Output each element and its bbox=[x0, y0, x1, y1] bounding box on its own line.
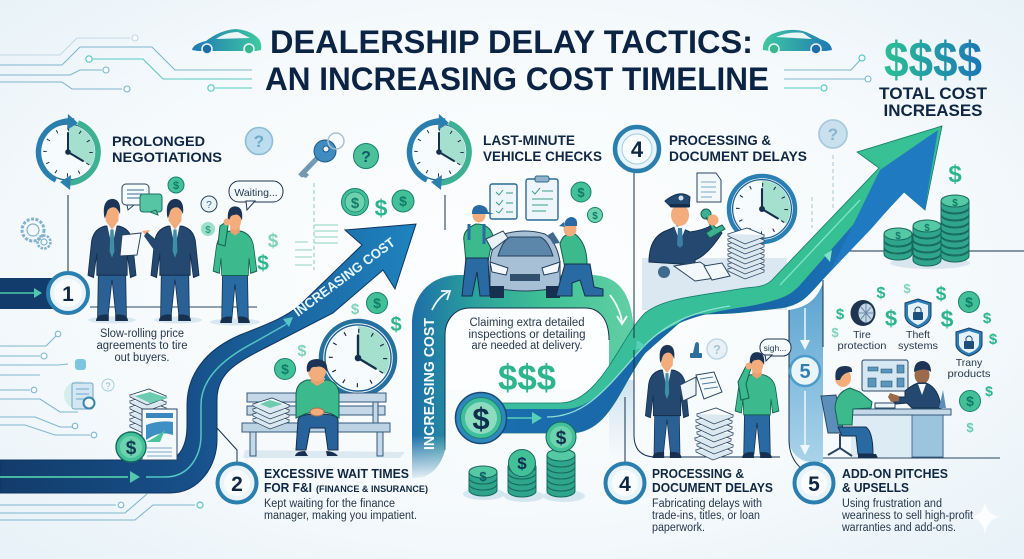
lower scene: paper stack bbox=[695, 408, 733, 460]
coin stacks right: $ bbox=[952, 198, 958, 209]
coins around large clock bbox=[274, 292, 402, 380]
total cost block: TOTAL COST bbox=[879, 85, 987, 103]
heading: last-minute vehicle checks: LAST-MINUTE bbox=[483, 132, 575, 148]
coins around large clock: $ bbox=[351, 301, 360, 318]
title bbox=[265, 24, 769, 97]
clock with arrows: prolonged negotiations bbox=[38, 114, 98, 190]
step badge 4 bottom bbox=[606, 464, 644, 502]
text block: add-on pitches: warranties and add-ons. bbox=[841, 522, 956, 534]
coins around large clock: $ bbox=[298, 343, 307, 360]
total cost block: INCREASES bbox=[884, 102, 982, 120]
step badge 5 bottom bbox=[794, 464, 834, 502]
step badge 4 bottom: 4 bbox=[619, 473, 631, 496]
coins and dollars: negotiations scene bbox=[168, 177, 414, 275]
step badge 5 bottom: 5 bbox=[808, 473, 820, 496]
clock: document delays bbox=[729, 176, 795, 242]
text block: add-on pitches: Using frustration and bbox=[842, 498, 942, 510]
text block: processing bottom: DOCUMENT DELAYS bbox=[652, 480, 773, 495]
dollar signs: mid: $$$ bbox=[498, 357, 556, 398]
product labels: Trany bbox=[956, 357, 983, 369]
people: two salesmen negotiating bbox=[88, 184, 202, 324]
dollars scatter: add-ons: $ bbox=[966, 393, 974, 409]
icon: shield trany products bbox=[956, 328, 982, 356]
text block: excessive wait times: FOR F&I bbox=[264, 480, 312, 495]
coin stacks right bbox=[884, 161, 970, 269]
heading: last-minute vehicle checks bbox=[483, 132, 602, 164]
circuit lines: top right bbox=[784, 55, 871, 91]
title: DEALERSHIP DELAY TACTICS: bbox=[270, 24, 753, 60]
text block: processing bottom: paperwork. bbox=[652, 522, 705, 534]
coin stacks right: $ bbox=[895, 231, 901, 242]
clipboards: $ bbox=[577, 185, 585, 200]
top left ribbon stub bbox=[0, 278, 55, 309]
clock with arrows: last-minute checks bbox=[409, 114, 469, 190]
text block: claiming bbox=[468, 317, 586, 352]
coin stacks right: $ bbox=[924, 223, 930, 234]
main total cost arrow ribbon bbox=[480, 126, 942, 433]
pale panels behind lower scenes bbox=[609, 251, 1024, 460]
text block: add-on pitches: ADD-ON PITCHES bbox=[842, 466, 948, 481]
text block: excessive wait times: EXCESSIVE WAIT TIMES bbox=[264, 466, 409, 481]
coins and dollars: negotiations scene: $ bbox=[173, 180, 179, 192]
dollars scatter: add-ons: $ bbox=[989, 331, 998, 348]
coins around large clock: $ bbox=[373, 295, 381, 311]
coin stacks below ribbon bbox=[463, 422, 585, 502]
coin stacks below ribbon: $ bbox=[556, 428, 567, 449]
product labels: products bbox=[948, 368, 990, 380]
text block: claiming: Claiming extra detailed bbox=[470, 317, 584, 329]
car with mechanics bbox=[462, 205, 603, 298]
coin stacks right: $ bbox=[948, 161, 962, 188]
heading: prolonged negotiations: PROLONGED bbox=[112, 133, 205, 149]
coin stacks below ribbon: $ bbox=[479, 469, 487, 484]
product labels: Theft bbox=[906, 329, 930, 341]
coins and dollars: negotiations scene: $ bbox=[375, 195, 388, 221]
dollars scatter: add-ons bbox=[831, 281, 998, 435]
heading: prolonged negotiations bbox=[112, 133, 222, 165]
person waiting with speech bubble: Waiting... bbox=[234, 187, 278, 199]
dollars scatter: add-ons: $ bbox=[983, 310, 992, 327]
question badge right bbox=[819, 120, 847, 148]
text block: processing bottom: trade-ins, titles, or loan bbox=[652, 510, 760, 522]
heading: processing top: DOCUMENT DELAYS bbox=[669, 148, 807, 164]
paper stack with coin: $ bbox=[126, 438, 137, 459]
text block: add-on pitches bbox=[841, 466, 974, 534]
heading: processing top: PROCESSING & bbox=[669, 132, 771, 148]
paper stack with coin bbox=[116, 389, 177, 462]
product labels: Tire bbox=[853, 329, 871, 341]
lower scene: frustrated customer: ? bbox=[713, 342, 721, 357]
body: slow-rolling: Slow-rolling price bbox=[100, 328, 184, 340]
dollars scatter: add-ons: $ bbox=[877, 285, 886, 302]
clipboards bbox=[490, 176, 602, 222]
coins and dollars: negotiations scene: $ bbox=[257, 252, 269, 275]
main dollar coin bbox=[456, 392, 506, 444]
step badge 5 mid bbox=[790, 356, 820, 386]
text block: claiming: are needed at delivery. bbox=[472, 340, 582, 352]
body: slow-rolling bbox=[96, 328, 188, 364]
icon: gears bbox=[22, 219, 50, 248]
text block: excessive wait times: manager, making you impatient. bbox=[264, 510, 417, 522]
question and coin decorations: negotiations scene: ? bbox=[254, 132, 264, 151]
icon: key bbox=[300, 133, 344, 178]
coin stacks below ribbon: $ bbox=[517, 454, 527, 473]
step badge 5 mid: 5 bbox=[799, 361, 811, 383]
circuit lines and document icon: lower left: ? bbox=[105, 381, 111, 391]
circuit lines: top left bbox=[0, 35, 252, 92]
product labels: systems bbox=[898, 340, 938, 352]
step badge 4 top bbox=[615, 127, 659, 171]
text block: add-on pitches: & UPSELLS bbox=[842, 480, 909, 495]
arch ribbon: increasing cost vertical: INCREASING COST bbox=[422, 318, 438, 450]
coins and dollars: negotiations scene: $ bbox=[205, 225, 211, 236]
dollars scatter: add-ons: $ bbox=[936, 284, 947, 305]
text block: processing bottom bbox=[652, 466, 773, 534]
dollars scatter: add-ons: $ bbox=[941, 306, 954, 332]
body: slow-rolling: agreements to tire bbox=[96, 340, 188, 352]
text block: excessive wait times: (FINANCE & INSURANCE) bbox=[316, 484, 428, 494]
arch ribbon: increasing cost vertical bbox=[395, 275, 634, 482]
bench with waiting person bbox=[242, 359, 405, 458]
icon: shield theft systems bbox=[905, 299, 931, 328]
clipboards: $ bbox=[592, 211, 598, 222]
product labels bbox=[838, 329, 990, 380]
text block: excessive wait times: Kept waiting for the finance bbox=[264, 498, 395, 510]
step badge 2 bbox=[218, 464, 256, 502]
paper stack and documents on desk bbox=[658, 228, 764, 281]
product labels: protection bbox=[838, 340, 887, 352]
heading: prolonged negotiations: NEGOTIATIONS bbox=[112, 149, 222, 165]
text block: processing bottom: PROCESSING & bbox=[652, 466, 744, 481]
vertical timeline lines bbox=[68, 155, 1000, 465]
total cost block bbox=[879, 32, 987, 120]
dollars scatter: add-ons: $ bbox=[836, 306, 845, 323]
icon: car left bbox=[192, 29, 261, 54]
body: slow-rolling: out buyers. bbox=[114, 352, 170, 364]
dollars scatter: add-ons: $ bbox=[965, 294, 973, 310]
step badge 1: 1 bbox=[62, 283, 74, 306]
text block: processing bottom: Fabricating delays with bbox=[652, 498, 762, 510]
text block: excessive wait times bbox=[264, 466, 428, 522]
lower scene: salesman with paperwork bbox=[645, 342, 722, 458]
coins and dollars: negotiations scene: $ bbox=[268, 231, 279, 252]
step badge 4 top: 4 bbox=[631, 137, 644, 162]
heading: processing top bbox=[669, 132, 807, 164]
add-on desk scene bbox=[821, 361, 998, 458]
lower scene: frustrated customer bbox=[707, 339, 791, 458]
person waiting with speech bubble bbox=[210, 181, 283, 326]
text block: add-on pitches: weariness to sell high-profit bbox=[841, 510, 974, 522]
sparkle bbox=[970, 502, 1000, 535]
lower left cost arrow ribbon bbox=[0, 224, 416, 493]
coins and dollars: negotiations scene: $ bbox=[399, 193, 407, 209]
title: AN INCREASING COST TIMELINE bbox=[265, 61, 769, 97]
icon: tire bbox=[850, 300, 876, 326]
question and coin decorations: negotiations scene: ? bbox=[206, 200, 212, 211]
step badge 2: 2 bbox=[231, 473, 243, 496]
circuit lines and document icon: lower left bbox=[0, 331, 203, 520]
lower left cost arrow ribbon: INCREASING COST bbox=[291, 234, 398, 319]
coins around large clock: $ bbox=[281, 361, 289, 377]
dollars scatter: add-ons: $ bbox=[903, 281, 911, 296]
heading: last-minute vehicle checks: VEHICLE CHECKS bbox=[483, 148, 602, 164]
desk officer with stamp bbox=[649, 194, 725, 265]
dollars scatter: add-ons: $ bbox=[831, 325, 839, 340]
lower scene: frustrated customer: sigh... bbox=[764, 343, 786, 353]
step 5 vertical band bbox=[789, 280, 823, 470]
text block: claiming: inspections or detailing bbox=[468, 329, 586, 341]
question badge right: ? bbox=[828, 125, 838, 144]
main dollar coin: $ bbox=[472, 401, 490, 436]
dollars scatter: add-ons: $ bbox=[966, 420, 974, 435]
dollars scatter: add-ons: $ bbox=[985, 383, 993, 399]
document icon bbox=[697, 173, 721, 202]
icon: car right bbox=[763, 30, 832, 54]
coins and dollars: negotiations scene: $ bbox=[351, 195, 360, 212]
dollars scatter: add-ons: $ bbox=[885, 306, 897, 331]
large clock bbox=[321, 321, 395, 395]
product board bbox=[862, 360, 908, 391]
step badge 1 bbox=[48, 273, 88, 313]
question and coin decorations: negotiations scene: ? bbox=[361, 149, 371, 166]
total cost block: $$$$ bbox=[884, 32, 982, 88]
coins around large clock: $ bbox=[390, 314, 402, 336]
question and coin decorations: negotiations scene bbox=[201, 128, 378, 212]
